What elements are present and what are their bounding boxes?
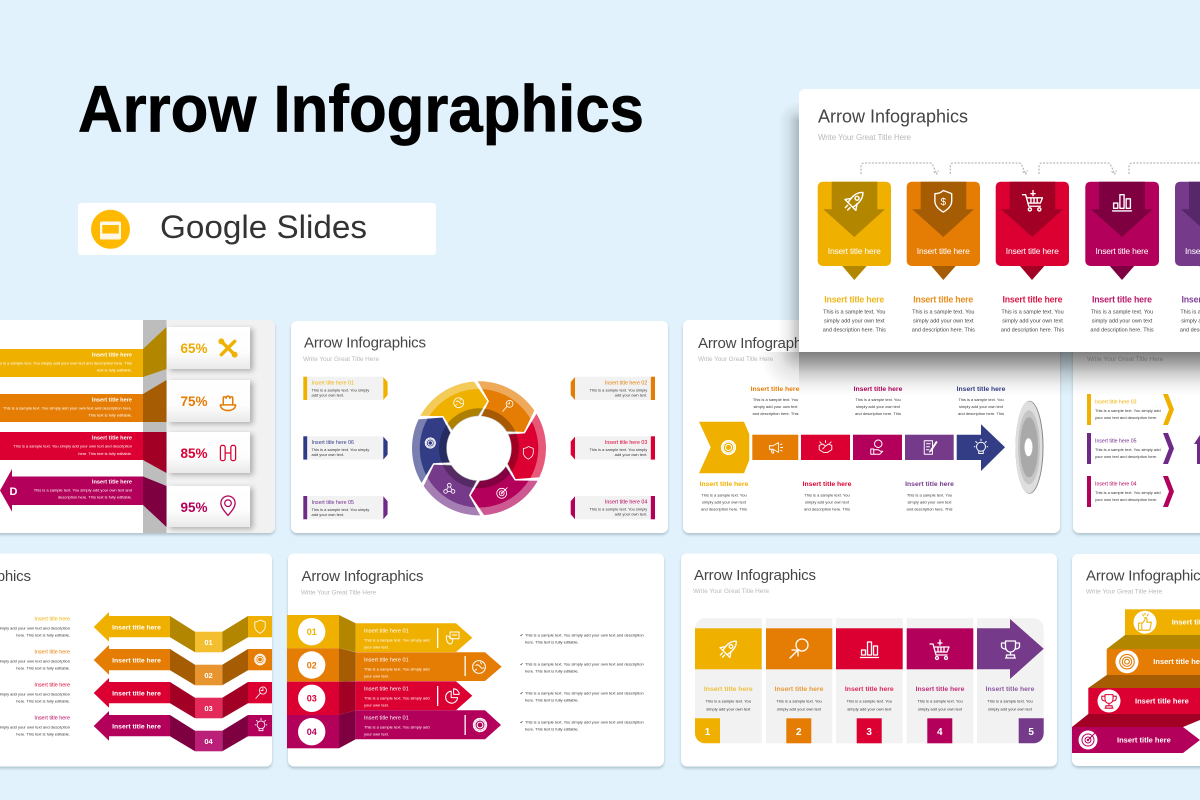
- text list: [0, 616, 70, 736]
- tag 02: Insert title here 02: [605, 380, 647, 386]
- panel: column steps: [681, 554, 1057, 766]
- column 3: [836, 618, 903, 743]
- column 2: [766, 618, 832, 743]
- panel subheading: Write Your Great Title Here: [301, 590, 376, 596]
- text: bottom labels: [700, 481, 954, 512]
- tag 03: Insert title here 03: [605, 440, 647, 446]
- caption 3: simply add your own text: [1002, 318, 1063, 324]
- text: top labels: Insert title here: [854, 386, 903, 393]
- tag 02: [571, 377, 655, 400]
- checklist: [520, 632, 644, 732]
- list item 04: This is a sample text. You simply add: [1095, 490, 1161, 495]
- panel heading: Arrow Infographics: [698, 335, 820, 352]
- banner 3: here. This text is fully editable.: [78, 451, 132, 456]
- card 2: Insert title here: [917, 246, 970, 256]
- banner 3: Insert title here: [92, 436, 132, 442]
- arrow fragment: [1194, 435, 1200, 464]
- caption 3: Insert title here: [1002, 294, 1063, 304]
- numbered arrow 04: This is a sample text. You simply add: [364, 724, 430, 730]
- text: top labels: This is a sample text. You: [753, 397, 798, 402]
- text: top labels: simply add your own text: [856, 404, 901, 409]
- banner 4 arrow: D: [10, 486, 18, 498]
- list item 04: [1087, 476, 1174, 507]
- tag 01: add your own text.: [312, 392, 344, 398]
- tag 04: add your own text.: [615, 512, 647, 516]
- tag 03: [571, 436, 655, 460]
- caption 4: simply add your own text: [1092, 318, 1153, 324]
- caption 4: and description here. This: [1090, 328, 1154, 334]
- tag 02: add your own text.: [615, 392, 647, 398]
- text list: Insert title here: [34, 715, 70, 721]
- text: bottom labels: and description here. This: [701, 506, 747, 512]
- text: bottom labels: simply add your own text: [907, 500, 952, 504]
- banner 4 arrow: This is a sample text. You simply add your own text and: [34, 488, 132, 492]
- caption 3: This is a sample text. You: [1001, 310, 1064, 316]
- list item 03: [1087, 394, 1174, 425]
- card 1: [818, 182, 891, 280]
- column 1: 1: [705, 727, 711, 738]
- banner 2: Insert title here: [92, 398, 132, 404]
- panel subheading: Write Your Great Title Here: [693, 588, 769, 595]
- column 3: This is a sample text. You: [847, 698, 892, 704]
- checklist: here. This text is fully editable.: [525, 668, 579, 674]
- caption 2: [912, 294, 975, 334]
- panel heading: Arrow Infographics: [302, 568, 424, 585]
- text: bottom labels: This is a sample text. You: [804, 492, 850, 498]
- zigzag arrow 03: [94, 678, 272, 718]
- text: top labels: Insert title here: [957, 386, 1006, 393]
- text: top labels: and description here. This: [753, 411, 798, 416]
- banner 1: text is fully editable.: [97, 368, 132, 373]
- tag 04: Insert title here 04: [605, 500, 647, 506]
- card 95%: [167, 486, 250, 527]
- card 3: Insert title here: [1006, 246, 1059, 256]
- list item 05: This is a sample text. You simply add: [1095, 447, 1161, 452]
- text: top labels: This is a sample text. You: [855, 397, 901, 402]
- column 1: simply add your own text: [706, 706, 751, 712]
- numbered arrow 03: This is a sample text. You simply add: [364, 696, 430, 700]
- numbered arrow 04: Insert title here 01: [364, 716, 409, 722]
- checklist: This is a sample text. You simply add your own text and description: [525, 632, 644, 638]
- list item 05: Insert title here 05: [1095, 438, 1137, 444]
- panel: zigzag arrows: [0, 554, 272, 766]
- tag 06: This is a sample text. You simply: [312, 447, 369, 452]
- text: bottom labels: This is a sample text. You: [907, 492, 952, 498]
- column 5 arrow: simply add your own text: [988, 706, 1033, 712]
- numbered arrow 04: your own text.: [364, 732, 389, 737]
- banner 2: This text is fully editable.: [88, 413, 132, 418]
- text: bottom labels: and description here. This: [907, 506, 952, 512]
- panel subheading: Write Your Great Title Here: [1086, 588, 1163, 596]
- checklist: here. This text is fully editable.: [525, 640, 579, 644]
- column 5 arrow: This is a sample text. You: [987, 698, 1033, 704]
- list item 04: Insert title here 04: [1095, 482, 1137, 488]
- card 5: [1175, 182, 1200, 280]
- card 4: [1085, 182, 1159, 280]
- step 4 arrow: Insert title here: [1117, 736, 1171, 744]
- column 2: simply add your own text: [777, 706, 822, 712]
- text list: Insert title here: [34, 649, 70, 655]
- text: bottom labels: This is a sample text. You: [701, 492, 747, 498]
- caption 2: and description here. This: [912, 328, 975, 334]
- banner 1: [0, 327, 166, 377]
- numbered arrow 01: This is a sample text. You simply add: [364, 638, 430, 642]
- banner 2: This is a sample text. You simply add your own text and description here.: [3, 406, 132, 410]
- text list: Insert title here: [34, 682, 70, 688]
- numbered arrow 02: your own text.: [364, 674, 389, 679]
- zigzag arrow 04: [94, 711, 272, 751]
- numbered arrow 03: your own text.: [364, 703, 389, 708]
- column 5 arrow: 5: [1028, 727, 1034, 738]
- caption 4: Insert title here: [1092, 294, 1152, 304]
- banner 1: Insert title here: [92, 352, 132, 358]
- tag 02: This is a sample text. You simply: [589, 388, 647, 392]
- zigzag arrow 01: 01: [204, 638, 213, 647]
- text: top labels: simply add your own text: [753, 404, 798, 409]
- column 1: Insert title here: [704, 686, 753, 693]
- tag 04: This is a sample text. You simply: [589, 506, 647, 512]
- column 1: This is a sample text. You: [706, 698, 751, 704]
- column 5 arrow: [977, 618, 1044, 743]
- list item 05: your own text and description here.: [1095, 454, 1157, 459]
- tag 01: [303, 377, 388, 400]
- banner 3: This is a sample text. You simply add your own text and description: [13, 444, 132, 449]
- list item 03: your own text and description here.: [1095, 415, 1157, 420]
- step 1: [1107, 609, 1200, 649]
- column 4: Insert title here: [916, 686, 965, 693]
- zigzag arrow 02: Insert title here: [112, 658, 161, 665]
- panel: staircase arrows: [1072, 554, 1200, 766]
- zigzag arrow 01: Insert title here: [112, 625, 161, 632]
- card 1: Insert title here: [828, 246, 881, 256]
- dashed connectors: [861, 163, 1200, 174]
- text list: Insert title here: [34, 616, 70, 622]
- tag 05: This is a sample text. You simply: [312, 507, 369, 512]
- step 3: [1072, 688, 1200, 727]
- caption 1: [823, 294, 886, 334]
- panel: horizontal arrow to target: [683, 320, 1060, 533]
- list item 03: This is a sample text. You simply add: [1095, 408, 1161, 413]
- banner 3: [0, 432, 166, 473]
- caption 2: This is a sample text. You: [912, 310, 974, 316]
- tag 03: add your own text.: [615, 452, 647, 457]
- column 2: This is a sample text. You: [776, 698, 822, 704]
- checklist: ✔: [520, 632, 523, 638]
- checklist: ✔: [520, 690, 523, 696]
- numbered arrow 03: 03: [307, 694, 317, 704]
- numbered arrow 02: This is a sample text. You simply add: [364, 666, 430, 672]
- caption 1: simply add your own text: [824, 318, 885, 324]
- step 3: Insert title here: [1135, 696, 1189, 706]
- tag 05: Insert title here 05: [312, 500, 354, 506]
- checklist: This is a sample text. You simply add your own text and description: [525, 662, 644, 666]
- numbered arrow 04: [287, 710, 501, 748]
- caption 1: This is a sample text. You: [823, 310, 885, 316]
- text: bottom labels: simply add your own text: [702, 500, 747, 504]
- caption 4: [1090, 294, 1154, 334]
- zigzag arrow 02: 02: [204, 671, 213, 680]
- tag 06: add your own text.: [312, 452, 344, 457]
- numbered arrow 01: your own text.: [364, 645, 389, 650]
- card 75%: [167, 380, 250, 422]
- column 4: [907, 618, 973, 743]
- zigzag arrow 03: 03: [204, 704, 213, 713]
- main title: Arrow Infographics: [78, 72, 644, 146]
- card 95%: 95%: [180, 500, 208, 515]
- column 2: Insert title here: [775, 686, 824, 693]
- chart: circular arrow ring: [412, 381, 546, 516]
- panel subheading: Write Your Great Title Here: [698, 356, 773, 363]
- panel: numbered arrows: [287, 554, 664, 766]
- badge label: Google Slides: [160, 209, 367, 245]
- checklist: This is a sample text. You simply add your own text and description: [525, 690, 644, 696]
- column 4: This is a sample text. You: [917, 698, 963, 704]
- card 75%: 75%: [180, 394, 208, 409]
- card 3: [996, 182, 1069, 280]
- panel: chevron list: [1073, 320, 1200, 533]
- caption 4: This is a sample text. You: [1091, 310, 1153, 316]
- tag 01: This is a sample text. You simply: [312, 388, 369, 392]
- text list: here. This text is fully editable.: [16, 698, 70, 703]
- column 3: Insert title here: [845, 686, 894, 693]
- text: top labels: This is a sample text. You: [958, 397, 1004, 402]
- checklist: here. This text is fully editable.: [525, 726, 579, 732]
- numbered arrow 01: [287, 615, 472, 652]
- list item 05: [1087, 433, 1174, 464]
- text: top labels: simply add your own text: [959, 404, 1004, 409]
- card 85%: 85%: [180, 446, 208, 461]
- text: top labels: Insert title here: [751, 386, 800, 393]
- list item 04: your own text and description here.: [1095, 497, 1157, 502]
- card 65%: [167, 327, 250, 369]
- zigzag arrow 04: 04: [204, 737, 213, 746]
- column 4: simply add your own text: [918, 706, 963, 712]
- caption 3: [1001, 294, 1064, 334]
- text: bottom labels: Insert title here: [905, 481, 954, 488]
- banner 2: [0, 380, 166, 422]
- panel subheading: Write Your Great Title Here: [1087, 356, 1164, 363]
- tag 01: Insert title here 01: [312, 380, 354, 386]
- panel heading: Arrow Infographics: [304, 334, 426, 352]
- zigzag arrow 03: Insert title here: [112, 691, 161, 698]
- column 1: [695, 618, 762, 743]
- zigzag arrow 01: [94, 612, 272, 652]
- caption 5: [1180, 294, 1200, 334]
- checklist: here. This text is fully editable.: [525, 698, 579, 702]
- panel: circular arrows: [291, 321, 668, 537]
- checklist: ✔: [520, 720, 523, 724]
- numbered arrow 02: Insert title here 01: [364, 658, 409, 664]
- text: top labels: [751, 386, 1006, 416]
- text: bottom labels: simply add your own text: [805, 500, 850, 504]
- banner 4 arrow: [0, 469, 166, 527]
- panel subheading: Write Your Great Title Here: [818, 133, 912, 142]
- icon: Google Slides logo: [91, 210, 130, 249]
- text list: here. This text is fully editable.: [16, 665, 70, 670]
- numbered arrow 01: Insert title here 01: [364, 628, 409, 634]
- text: top labels: and description here. This: [855, 411, 901, 416]
- caption 2: Insert title here: [913, 294, 973, 304]
- tag 04: [571, 496, 655, 519]
- tag 05: [303, 496, 388, 519]
- panel heading: Arrow Infographics: [694, 567, 816, 584]
- caption 2: simply add your own text: [913, 318, 974, 324]
- panel subheading: Write Your Great Title Here: [303, 356, 379, 363]
- panel: featured slide: [759, 89, 1200, 396]
- badge: Google Slides: [78, 203, 436, 255]
- card 2: [907, 182, 980, 280]
- icon: target disc: [1016, 401, 1044, 494]
- checklist: This is a sample text. You simply add your own text and description: [525, 720, 644, 724]
- tag 06: [303, 436, 388, 460]
- numbered arrow 01: 01: [307, 627, 317, 637]
- banner 4 arrow: description here. This text is fully editable.: [58, 495, 132, 500]
- text: top labels: and description here. This: [958, 411, 1004, 416]
- text: bottom labels: Insert title here: [803, 481, 852, 488]
- card 2: $: [941, 197, 947, 208]
- text: bottom labels: Insert title here: [700, 481, 749, 488]
- card 85%: [167, 432, 250, 473]
- text: bottom labels: and description here. This: [804, 506, 850, 512]
- caption 1: Insert title here: [824, 294, 884, 304]
- checklist: ✔: [520, 662, 523, 666]
- card 4: Insert title here: [1096, 246, 1149, 256]
- tag 03: This is a sample text. You simply: [589, 447, 647, 452]
- numbered arrow 03: Insert title here 01: [364, 686, 409, 692]
- numbered arrow 04: 04: [307, 727, 317, 737]
- zigzag arrow 02: [94, 645, 272, 685]
- tag 06: Insert title here 06: [312, 440, 354, 446]
- caption 1: and description here. This: [823, 328, 886, 334]
- text list: here. This text is fully editable.: [16, 632, 70, 637]
- caption 3: and description here. This: [1001, 328, 1064, 334]
- numbered arrow 02: 02: [307, 660, 317, 670]
- column 3: 3: [866, 727, 872, 738]
- panel heading: Arrow Infographics: [818, 106, 968, 126]
- banner 4 arrow: Insert title here: [92, 480, 132, 486]
- panel: percent banners: [0, 320, 275, 533]
- column 5 arrow: Insert title here: [986, 686, 1035, 693]
- numbered arrow 03: [287, 681, 472, 715]
- column 3: simply add your own text: [847, 706, 892, 712]
- tag 05: add your own text.: [312, 512, 344, 517]
- card 65%: 65%: [180, 341, 208, 356]
- step 2: [1088, 649, 1200, 688]
- numbered arrow 02: [287, 648, 502, 682]
- column 4: 4: [937, 727, 943, 738]
- zigzag arrow 04: Insert title here: [112, 724, 161, 731]
- list item 03: Insert title here 03: [1095, 400, 1137, 406]
- column 2: 2: [796, 727, 802, 738]
- text list: here. This text is fully editable.: [16, 731, 70, 736]
- arrow chain: [699, 422, 1005, 473]
- step 4 arrow: [1072, 727, 1200, 753]
